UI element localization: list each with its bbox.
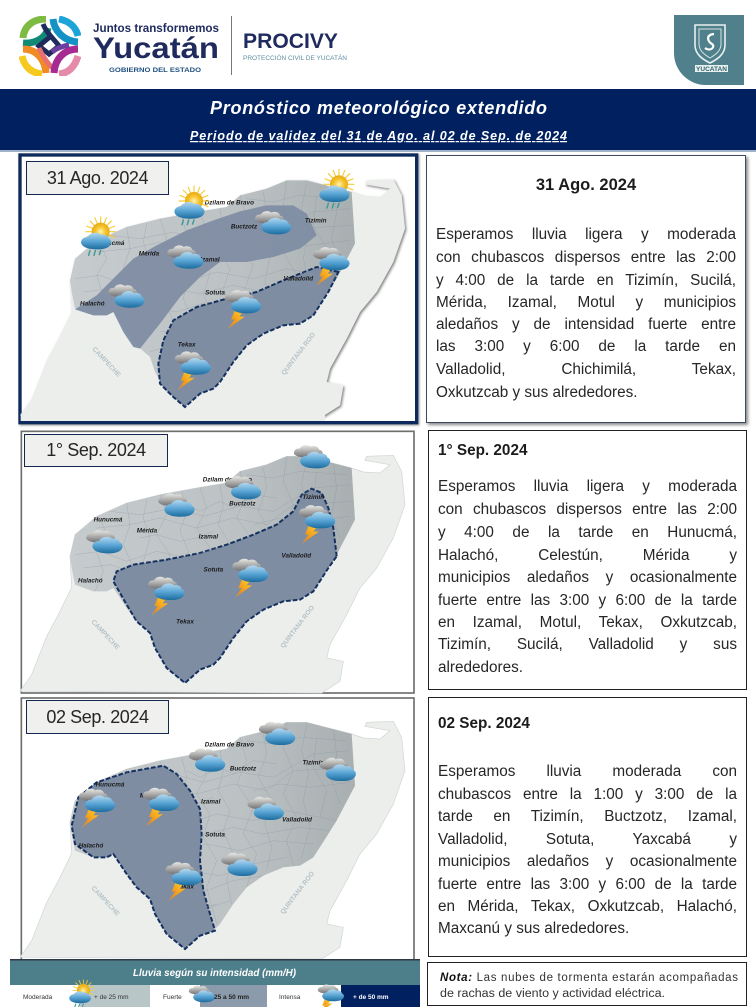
map labels: Halachó — [80, 300, 105, 307]
map labels: Mérida — [139, 250, 160, 257]
panel: text 1 Sep — [428, 430, 747, 690]
icon: woven colour emblem — [19, 16, 81, 76]
icons: weather — [79, 722, 356, 900]
legend: fuerte — [163, 985, 249, 1002]
body text — [438, 478, 737, 676]
map labels — [80, 199, 327, 379]
body text: Halachó, Celestún, Mérida y — [438, 547, 737, 564]
body text: en Izamal, Motul, Tekax, Oxkutzcab, — [438, 614, 737, 631]
map labels: QUINTANA ROO — [281, 331, 317, 377]
body text: Tizimín, Sucilá, Valladolid y sus — [438, 636, 737, 653]
date label 02 Sep: 02 Sep. 2024 — [46, 707, 149, 727]
header banner — [0, 89, 756, 152]
panel: map 31 Ago — [18, 153, 421, 427]
map labels: CAMPECHE — [90, 885, 121, 918]
icons: weather — [81, 169, 354, 389]
body text: con chubascos dispersos entre las 2:00 — [438, 501, 737, 518]
date label 1 Sep — [24, 434, 168, 467]
map labels — [79, 741, 324, 918]
map labels: Buctzotz — [230, 766, 257, 773]
map labels: Hunucmá — [96, 240, 125, 247]
text: logo wordmark: PROCIVY — [243, 30, 338, 53]
map labels: Izamal — [199, 533, 218, 540]
body text: Maxcanú y sus alrededores. — [438, 920, 629, 937]
map labels: Mérida — [137, 527, 158, 534]
icons: weather — [86, 445, 335, 615]
date label 31 Ago: 31 Ago. 2024 — [47, 168, 148, 188]
icon: Yucatán coat of arms seal — [674, 15, 744, 85]
map labels: Buctzotz — [229, 500, 256, 507]
map labels: Sotuta — [203, 566, 224, 573]
legend: intensa — [279, 984, 389, 1008]
legend: moderada: + de 25 mm — [94, 994, 129, 1001]
body text: en Mérida, Tekax, Oxkutzcab, Halachó, — [438, 898, 737, 915]
legend: intensa: + de 50 mm — [353, 994, 389, 1001]
legend: rain intensity — [10, 959, 420, 1007]
note box — [427, 962, 747, 1006]
body text — [438, 763, 737, 937]
map labels: Dzilam de Bravo — [203, 476, 252, 483]
map labels: Buctzotz — [231, 223, 258, 230]
map labels: Sotuta — [205, 832, 225, 839]
map labels: Tekax — [176, 884, 194, 891]
map labels — [78, 476, 324, 652]
body text: fuerte entre las 3:00 y 6:00 de la tarde — [438, 876, 737, 893]
legend: fuerte: 25 a 50 mm — [214, 994, 249, 1001]
legend: moderada: Moderada — [23, 994, 53, 1001]
heading: 31 Ago. 2024 — [536, 176, 636, 194]
body text: Oxkutzcab y sus alrededores. — [436, 384, 638, 401]
date label 1 Sep: 1° Sep. 2024 — [46, 440, 146, 460]
body text: fuerte entre las 3:00 y 6:00 de la tarde — [438, 592, 737, 609]
panel: text 02 Sep — [428, 697, 747, 957]
map labels: Mérida — [140, 792, 161, 799]
zone: strong rain, dashed — [158, 267, 338, 407]
panel: map 1 Sep — [20, 430, 415, 694]
text: logo wordmark: GOBIERNO DEL ESTADO — [109, 67, 201, 74]
map labels: Tekax — [178, 342, 196, 349]
map labels: QUINTANA ROO — [280, 870, 316, 916]
map labels: CAMPECHE — [91, 346, 122, 379]
map labels: Tekax — [176, 618, 194, 625]
map labels: Izamal — [200, 256, 220, 263]
panel: map 02 Sep — [20, 697, 415, 959]
heading: 02 Sep. 2024 — [438, 715, 530, 732]
map labels: Izamal — [201, 798, 221, 805]
body text: municipios aledaños y ocasionalmente — [438, 853, 737, 870]
body text: Esperamos lluvia ligera y moderada — [438, 478, 737, 495]
body text: Valladolid, Sotuta, Yaxcabá y — [438, 831, 737, 848]
body text: alrededores. — [438, 659, 523, 676]
body text: Esperamos lluvia moderada con — [438, 763, 737, 780]
title: Pronóstico meteorológico extendido — [210, 98, 547, 118]
text: logo wordmark: Juntos transformemos — [93, 21, 219, 35]
validity period: Periodo de validez del 31 de Ago. al 02 de Sep. de 2024 — [190, 129, 567, 143]
legend title: Lluvia según su intensidad (mm/H) — [133, 968, 297, 979]
body text — [436, 226, 736, 401]
map labels: CAMPECHE — [90, 619, 121, 652]
body text: Valladolid, Chichimilá, Tekax, — [436, 361, 736, 378]
body text: Esperamos lluvia ligera y moderada — [436, 226, 736, 243]
map labels: Dzilam de Bravo — [205, 741, 254, 748]
date label 31 Ago — [26, 161, 169, 195]
map labels: Tizimín — [302, 759, 324, 766]
body text: las 3:00 y 6:00 de la tarde en — [436, 338, 736, 355]
map labels: Valladolid — [282, 817, 312, 824]
map labels: Valladolid — [282, 552, 311, 559]
logo: Juntos transformemos Yucatán — [19, 16, 347, 76]
body text: aledaños y de intensidad fuerte entre — [436, 316, 736, 333]
note box: de rachas de viento y actividad eléctrica. — [440, 988, 665, 1000]
legend: intensa: Intensa — [279, 994, 301, 1001]
text: logo wordmark: Yucatán — [93, 32, 219, 65]
panel: text 31 Ago — [426, 155, 746, 423]
body text: y 4:00 de la tarde en Hunucmá, — [438, 524, 737, 541]
body text: Mérida, Izamal, Motul y municipios — [436, 294, 736, 311]
map labels: Hunucmá — [94, 517, 123, 524]
legend: moderada — [23, 979, 129, 1008]
map labels: Valladolid — [284, 276, 313, 283]
text: logo wordmark: PROTECCIÓN CIVIL DE YUCATÁN — [243, 55, 347, 62]
icon: Yucatán coat of arms seal: YUCATAN — [696, 67, 727, 73]
map labels: Tizimín — [302, 494, 324, 501]
date label 02 Sep — [26, 700, 169, 734]
heading: 1° Sep. 2024 — [438, 442, 527, 459]
map labels: QUINTANA ROO — [280, 604, 316, 650]
body text: tarde en Tizimín, Buctzotz, Izamal, — [438, 808, 737, 825]
map labels: Tizimín — [305, 217, 327, 224]
map labels: Halachó — [79, 842, 103, 849]
body text: municipios aledaños y ocasionalmente — [438, 569, 737, 586]
zone: strong rain, dashed — [72, 766, 215, 949]
body text: y 4:00 de la tarde en Tizimín, Sucilá, — [436, 272, 736, 289]
body text: chubascos entre la 1:00 y 3:00 de la — [438, 786, 737, 803]
zone: strong rain, dashed — [113, 489, 337, 683]
text: logo wordmark — [93, 16, 347, 75]
map labels: Hunucmá — [96, 781, 125, 788]
legend: fuerte: Fuerte — [163, 994, 182, 1001]
body text: con chubascos dispersos entre las 2:00 — [436, 249, 736, 266]
map labels: Dzilam de Bravo — [205, 199, 254, 206]
note box: Nota: Las nubes de tormenta estarán acompañadas — [440, 972, 738, 984]
map labels: Halachó — [78, 577, 103, 584]
map labels: Sotuta — [205, 290, 225, 297]
zone: moderate rain band — [75, 205, 317, 349]
